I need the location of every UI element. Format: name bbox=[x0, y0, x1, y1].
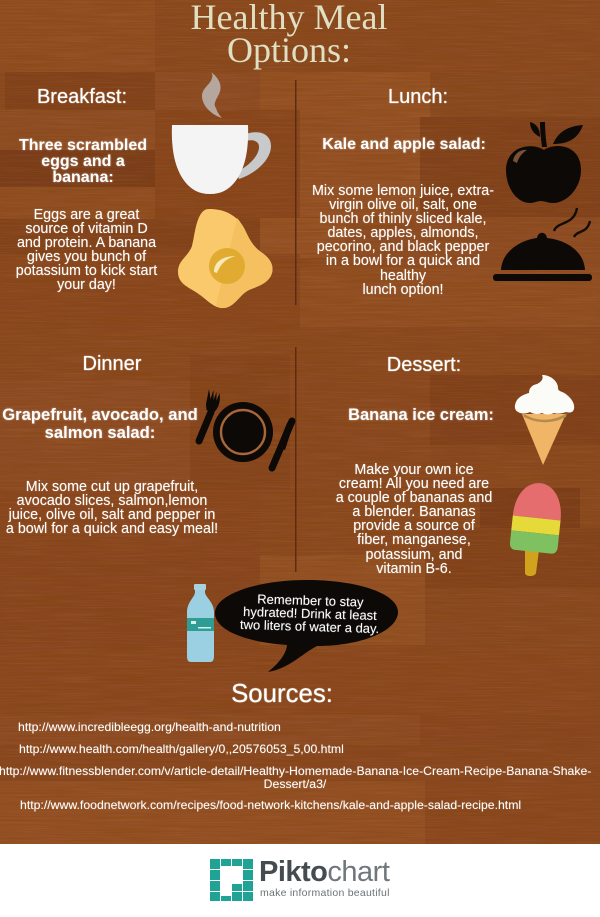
dinner body text: Mix some cut up grapefruit, bbox=[26, 479, 198, 495]
breakfast body text: Eggs are a great bbox=[34, 207, 139, 223]
icon: apple bbox=[506, 122, 583, 203]
source link 3: http://www.fitnessblender.com/v/article-detail/Healthy-Homemade-Banana-Ice-Cream-Recipe-Banana-Shake- bbox=[0, 764, 591, 778]
dinner subheading bbox=[2, 405, 198, 442]
lunch subheading: Kale and apple salad: bbox=[322, 136, 486, 153]
lunch body text: pecorino, and black pepper bbox=[317, 239, 489, 255]
dessert body text: vitamin B-6. bbox=[376, 561, 452, 577]
speech bubble text: hydrated! Drink at least bbox=[243, 604, 377, 623]
piktochart logo bbox=[210, 856, 390, 901]
dessert body text: provide a source of bbox=[353, 518, 475, 534]
dinner subheading: salmon salad: bbox=[45, 422, 155, 442]
lunch body text: dates, apples, almonds, bbox=[327, 225, 478, 241]
dinner heading: Dinner bbox=[83, 353, 141, 375]
speech bubble text bbox=[240, 591, 379, 636]
dinner subheading: Grapefruit, avocado, and bbox=[2, 405, 198, 424]
speech bubble bbox=[215, 580, 398, 672]
lunch body text: lunch option! bbox=[362, 282, 444, 298]
dessert body text: Make your own ice bbox=[354, 462, 474, 478]
lunch body text: healthy bbox=[380, 268, 426, 284]
icon: ice cream cone bbox=[514, 375, 574, 465]
speech bubble text: Remember to stay bbox=[257, 591, 364, 610]
breakfast subheading: eggs and a bbox=[41, 153, 125, 170]
speech bubble text: two liters of water a day. bbox=[240, 617, 379, 636]
breakfast body text bbox=[16, 207, 158, 293]
dessert body text: potassium, and bbox=[366, 547, 462, 563]
icon: popsicle bbox=[510, 483, 561, 576]
breakfast subheading: banana: bbox=[52, 169, 114, 186]
lunch body text: Mix some lemon juice, extra- bbox=[312, 183, 494, 199]
dinner body text bbox=[6, 479, 218, 537]
title bbox=[191, 0, 387, 70]
breakfast body text: your day! bbox=[57, 277, 116, 293]
icon: plate with fork and knife bbox=[196, 389, 296, 472]
icon: coffee cup bbox=[172, 72, 271, 194]
breakfast subheading: Three scrambled bbox=[19, 137, 147, 154]
source link 2: http://www.health.com/health/gallery/0,,20576053_5,00.html bbox=[19, 742, 344, 756]
logo tagline: make information beautiful bbox=[260, 887, 390, 899]
dessert subheading: Banana ice cream: bbox=[348, 406, 494, 424]
dessert body text: a couple of bananas and bbox=[336, 490, 492, 506]
dessert body text bbox=[336, 462, 492, 577]
source link 3 bbox=[0, 764, 592, 790]
dinner body text: avocado slices, salmon,lemon bbox=[17, 493, 207, 509]
lunch body text bbox=[312, 183, 494, 298]
dinner body text: juice, olive oil, salt and pepper in bbox=[9, 507, 215, 523]
breakfast body text: and protein. A banana bbox=[17, 235, 156, 251]
dinner body text: a bowl for a quick and easy meal! bbox=[6, 521, 218, 537]
dessert body text: cream! All you need are bbox=[339, 476, 489, 492]
breakfast subheading bbox=[18, 137, 148, 186]
breakfast body text: source of vitamin D bbox=[25, 221, 148, 237]
breakfast body text: potassium to kick start bbox=[16, 263, 157, 279]
dessert body text: fiber, manganese, bbox=[357, 532, 471, 548]
icon: serving dish bbox=[493, 208, 592, 281]
dessert heading: Dessert: bbox=[387, 354, 461, 376]
sources heading: Sources: bbox=[231, 680, 333, 708]
source link 1: http://www.incredibleegg.org/health-and-nutrition bbox=[18, 720, 281, 734]
dessert body text: a blender. Bananas bbox=[352, 504, 476, 520]
title: Options: bbox=[227, 30, 351, 70]
source link 4: http://www.foodnetwork.com/recipes/food-network-kitchens/kale-and-apple-salad-recipe.html bbox=[20, 798, 521, 812]
icon: water bottle bbox=[187, 584, 214, 662]
icon: fried egg bbox=[178, 209, 272, 308]
breakfast body text: gives you bunch of bbox=[27, 249, 146, 265]
lunch heading: Lunch: bbox=[388, 86, 448, 108]
lunch body text: bunch of thinly sliced kale, bbox=[320, 211, 486, 227]
source link 3: Dessert/a3/ bbox=[264, 776, 326, 790]
lunch body text: virgin olive oil, salt, one bbox=[329, 197, 477, 213]
divider lines bbox=[295, 80, 296, 305]
logo wordmark: Piktochart bbox=[259, 856, 389, 888]
lunch body text: in a bowl for a quick and bbox=[326, 253, 480, 269]
breakfast heading: Breakfast: bbox=[37, 86, 127, 108]
